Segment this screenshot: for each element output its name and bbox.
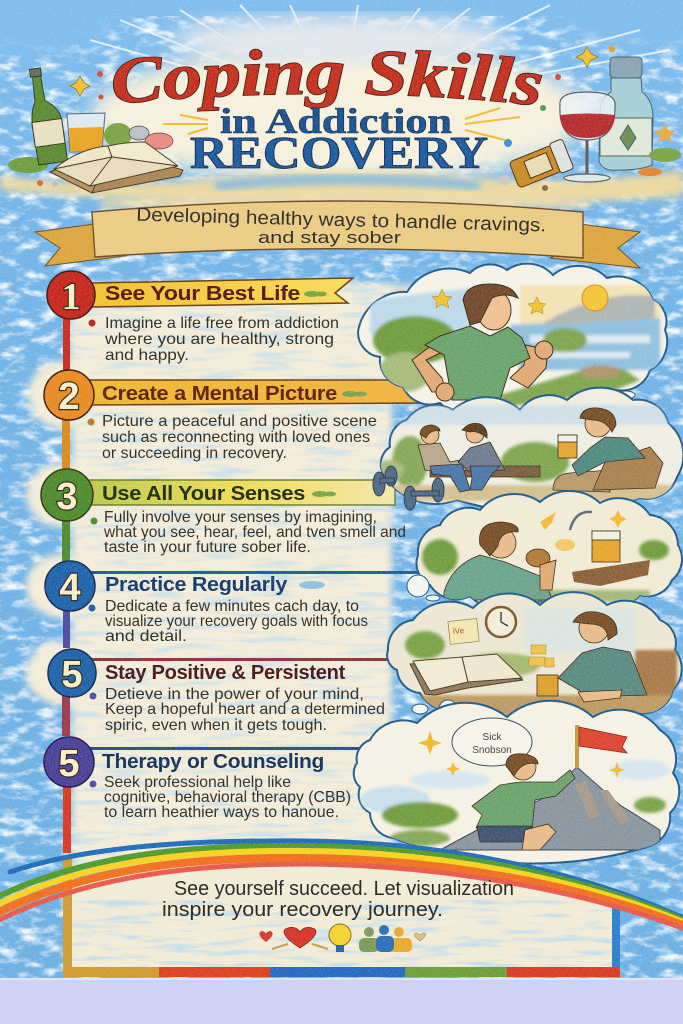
step 2 leaf [342,391,367,397]
thought bubbles 1 [617,391,635,420]
step 4 badge [45,561,95,611]
step 6 badge: 5 [58,743,80,785]
step 6 text: to learn heathier ways to hanoue. [104,804,339,821]
step 5 text: Detieve in the power of your mind, [105,686,364,703]
sparkles [418,731,625,778]
step 1 badge [47,271,95,319]
step 5 rail [62,690,70,736]
step 4 text [105,598,368,645]
step 2 [44,370,429,471]
step 5 badge [48,649,96,697]
title [112,48,542,178]
panel: steps backdrop [26,285,417,870]
speech bubble: Sick [483,732,502,743]
title: RECOVERY [190,128,488,178]
step 3 text: what you see, hear, feel, and tven smell and [103,524,406,541]
man with drink [553,408,663,492]
stars [432,289,546,314]
icon: clock [486,607,516,637]
icon: dumbbells [373,466,444,510]
left still life: bushes and sand [8,123,173,173]
header cream glow [0,16,683,208]
connector to cloud [340,289,405,293]
icon: green bottle [25,66,68,165]
step 3 text: taste in your future sober life. [104,539,311,556]
thought cloud 3: senses [416,491,682,617]
step 6 [44,737,366,853]
step 4 accent [299,581,325,589]
step 5 text: spiric, even when it gets tough. [105,717,327,734]
step 5 header rule [90,658,393,661]
header decorations [37,46,681,191]
icon: open journal [410,654,523,695]
step 4 bullet [88,604,96,612]
step 2 text: Picture a peaceful and positive scene [102,413,377,430]
step 2 text: or succeeding in recovery. [102,445,287,462]
step 4 heading: Practice Regularly [105,574,288,596]
panel: closing message [63,855,620,977]
step 3 leaf [312,491,336,497]
banner right tail [550,224,640,268]
icon row [259,924,426,952]
icon: whisky glass [67,113,105,152]
step 3 text: Fully involve your senses by imagining, [104,509,377,526]
banner text: and stay sober [258,228,401,247]
step 1 text: where you are healthy, strong [104,331,334,348]
step 6 rail [63,783,71,853]
thought bubbles 3 [412,700,457,718]
frame right [612,905,620,970]
title: in Addiction [220,101,452,141]
step 5 heading: Stay Positive & Persistent [105,662,346,684]
icon: tiny heart [414,933,426,941]
bench [430,466,540,477]
climber [472,754,575,850]
step 3 badge [41,469,93,521]
lavender footer band [0,978,683,1024]
step 1 text: and happy. [105,347,189,364]
speech bubble: Snobson [472,745,512,756]
step 3 heading: Use All Your Senses [102,483,305,505]
step 6 header rule [88,747,366,750]
step 2 heading: Create a Mental Picture [102,383,337,405]
thought cloud 2: friends and drink [373,388,683,513]
closing text: See yourself succeed. Let visualization [174,878,514,900]
thought cloud 5: mountain climb [354,701,679,863]
step 1 text: Imagine a life free from addiction [105,315,339,332]
step 4 text: Dedicate a few minutes cach day, to [105,598,359,615]
banner text [136,205,546,247]
icon: light bulb [329,924,351,952]
step 6 heading: Therapy or Counseling [102,751,324,773]
icon: wine glass [560,92,615,182]
step 4 text: and detail. [105,628,187,645]
step 6 bullet [90,780,96,788]
banner [35,201,640,268]
step 1 badge: 1 [62,276,80,318]
step 3 text [103,509,406,556]
step 1 [47,271,353,370]
icon: tipped pill bottle [508,139,574,190]
step 5 bullet [90,692,96,700]
step 6 text: Seek professional help like [104,774,291,791]
step 2 rail [62,415,70,471]
step 1 rail [63,318,70,370]
step 2 badge [44,370,94,420]
step 6 text [104,774,351,821]
banner body [92,201,583,258]
speech bubble [452,718,532,766]
step 4 [45,561,418,648]
icon: people [359,925,412,952]
title: Coping Skills [112,48,542,112]
step 2 badge: 2 [58,376,80,418]
step 4 badge: 4 [59,567,81,609]
stacked blocks [529,645,554,667]
icon: blue bottle [599,57,653,170]
step 6 text: cognitive, behavioral therapy (CBB) [104,789,351,806]
header sun rays [90,5,670,110]
step 4 rail [63,603,70,648]
man running [412,284,553,401]
mountain [440,767,660,850]
sticky note [448,618,479,644]
closing text [162,878,514,921]
thought bubbles 2 [407,575,464,611]
flag [575,725,627,768]
step 1 text [104,315,339,364]
sun [582,285,608,311]
banner text: Developing healthy ways to handle cravings. [136,205,546,236]
step 3 [41,469,406,561]
closing text: inspire your recovery journey. [162,899,443,921]
icon: small heart [259,931,273,942]
title accent sparks [163,108,520,140]
step 5 text [105,686,385,734]
thought cloud 1: running man [358,264,667,419]
rainbow [0,841,683,931]
step 3 rail [62,515,70,561]
thought cloud 4: journal [386,591,683,716]
step 5 [48,649,393,736]
step 1 heading: See Your Best Life [105,283,300,305]
sticky note: iVe [453,626,465,636]
banner left tail [35,224,125,266]
man at table [537,612,647,702]
step 3 bullet [90,518,98,524]
frame left [63,855,72,970]
step 5 badge: 5 [61,654,83,696]
icon: open book [50,142,183,193]
step 1 leaf [304,291,327,297]
step 1 bullet [88,320,96,326]
sensory marks [540,510,627,551]
step 3 ribbon [88,480,395,505]
step 2 text: such as reconnecting with loved ones [102,429,370,446]
step 1 ribbon [92,278,353,307]
icon: big heart [272,927,328,949]
step 4 header rule [87,571,418,574]
step 2 bullet [88,418,94,426]
step 3 badge: 3 [56,476,78,518]
step 5 text: Keep a hopeful heart and a determined [105,701,385,718]
step 2 ribbon [88,380,429,405]
man tasting [444,522,620,600]
step 6 badge [44,737,94,787]
two friends on bench [418,423,505,492]
step 2 text [102,413,377,462]
frame bottom [63,967,620,977]
icon: sparkle left [70,76,90,96]
step 4 text: visualize your recovery goals with focus [105,613,368,630]
